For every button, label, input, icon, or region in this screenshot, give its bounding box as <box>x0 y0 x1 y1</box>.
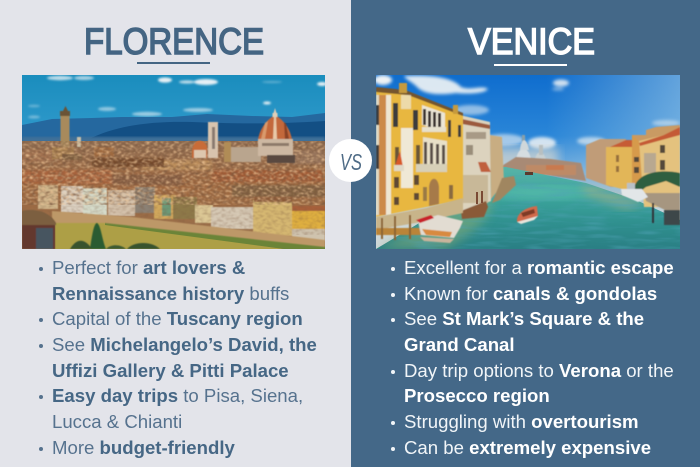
motor boat <box>517 206 538 224</box>
photo: Florence skyline <box>22 75 325 249</box>
list item: expensive: Can be extremely expensive <box>404 437 651 458</box>
vs badge: VS <box>340 149 362 175</box>
list item: day trips: Easy day trips to Pisa, Siena, <box>52 385 303 406</box>
mountains <box>22 113 325 175</box>
list: Venice facts <box>391 257 674 458</box>
foreground jetty and boats <box>376 198 463 243</box>
list item: budget: More budget-friendly <box>52 437 235 458</box>
photo: Venice Grand Canal <box>376 75 680 249</box>
left middle buildings <box>460 115 516 219</box>
distant buildings <box>488 147 558 173</box>
Duomo and campanile <box>192 108 295 163</box>
list: Florence facts <box>39 257 317 458</box>
left palazzo <box>376 83 463 217</box>
list item continuation: Lucca: Lucca & Chianti <box>52 411 182 432</box>
Roof colour patches <box>22 150 325 197</box>
heading: Venice: VENICE <box>468 21 595 62</box>
distant boats and mooring poles <box>476 172 533 204</box>
panel: Venice background <box>351 0 700 467</box>
list item: romantic: Excellent for a romantic escape <box>404 257 674 278</box>
water <box>376 167 680 249</box>
texture over city <box>22 141 325 205</box>
clouds <box>374 75 680 149</box>
panel: Florence background <box>0 0 351 467</box>
city mass <box>22 141 325 249</box>
list item: St Mark's: See St Mark’s Square & the <box>404 308 644 329</box>
heading underline: Florence <box>137 62 210 64</box>
heading: Florence: FLORENCE <box>84 21 264 62</box>
list item: David: See Michelangelo’s David, the <box>52 334 317 355</box>
embankment wall, green bank and river <box>55 222 284 249</box>
list item: day trips: Day trip options to Verona or the <box>404 360 674 381</box>
riverside buildings <box>38 185 325 241</box>
list item continuation: history buffs: Rennaissance history buffs <box>52 283 289 304</box>
list item continuation: Grand Canal: Grand Canal <box>404 334 515 355</box>
list item: art lovers: Perfect for art lovers & <box>52 257 245 278</box>
Palazzo Vecchio tower <box>52 106 164 167</box>
list item: canals: Known for canals & gondolas <box>404 283 657 304</box>
right buildings <box>586 125 680 225</box>
heading underline: Venice <box>494 64 567 66</box>
list item continuation: Prosecco: Prosecco region <box>404 385 550 406</box>
list item: overtourism: Struggling with overtourism <box>404 411 639 432</box>
list item continuation: Uffizi: Uffizi Gallery & Pitti Palace <box>52 360 289 381</box>
vs badge <box>329 139 372 182</box>
list item: Tuscany: Capital of the Tuscany region <box>52 308 303 329</box>
foreground trees and building <box>22 210 160 249</box>
